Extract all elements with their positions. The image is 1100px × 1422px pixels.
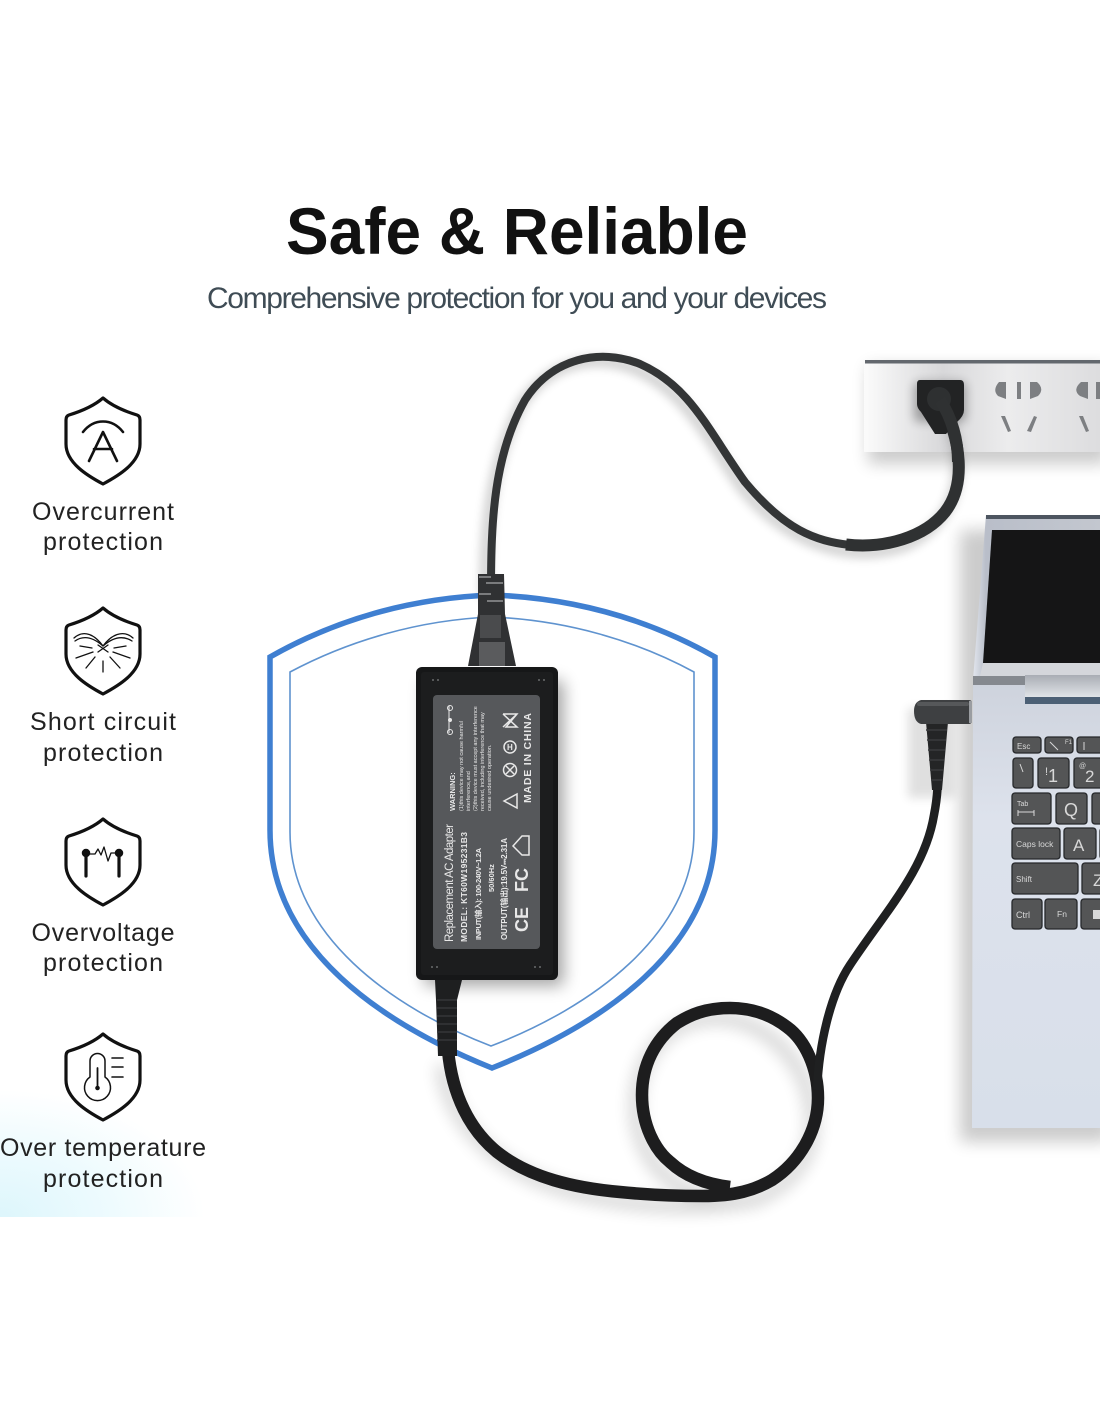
- bottom strain relief: [435, 980, 462, 1056]
- key legends: Q: [1064, 800, 1078, 820]
- icon: temperature shield: [66, 1034, 140, 1120]
- key legends: Esc: [1017, 742, 1030, 751]
- adapter specification text: [444, 824, 509, 942]
- power cable with shadow: [485, 357, 959, 598]
- feature: short circuit protection: [30, 608, 176, 767]
- key legends: Caps lock: [1016, 839, 1054, 849]
- power adapter brick: [416, 667, 564, 986]
- label: over temperature: Over temperature: [0, 1134, 206, 1162]
- adapter specification text: INPUT(输入): 100-240V~1.2A: [473, 847, 483, 940]
- laptop: [960, 515, 1100, 1142]
- certification marks: CE: [512, 907, 532, 932]
- label: overcurrent: protection: [43, 528, 163, 556]
- protection shield outline: [270, 595, 715, 1068]
- key legends: Fn: [1057, 909, 1067, 919]
- label: over temperature: protection: [43, 1165, 163, 1193]
- key legends: @: [1079, 763, 1086, 770]
- key legends: Tab: [1017, 801, 1028, 808]
- adapter warning text: (1)this device may not cause harmful: [459, 721, 465, 811]
- wall plug: [914, 380, 966, 462]
- label: overvoltage: Overvoltage: [32, 919, 174, 947]
- adapter warning text: cause undesired operation.: [487, 744, 493, 811]
- feature: overvoltage protection: [32, 819, 174, 977]
- keyboard: [1012, 737, 1100, 929]
- power strip: [864, 360, 1100, 464]
- title: Safe & Reliable: [286, 194, 748, 268]
- key legends: !: [1045, 766, 1048, 778]
- icon: overvoltage shield: [66, 819, 140, 905]
- adapter label plate: [433, 695, 540, 949]
- key legends: [1016, 740, 1100, 920]
- subtitle: Comprehensive protection for you and your devices: [207, 282, 827, 315]
- corner screws: [431, 679, 545, 968]
- laptop screen: [983, 530, 1100, 663]
- key legends: 1: [1048, 766, 1058, 786]
- adapter warning text: interference,and: [466, 771, 472, 811]
- icon: overcurrent shield: [66, 398, 140, 484]
- DC connector plug: [908, 700, 972, 798]
- power adapter brick: FC: [512, 868, 532, 892]
- label: short circuit: Short circuit: [30, 708, 176, 736]
- laptop base: [972, 684, 1100, 1128]
- key legends: F1: [1065, 740, 1073, 746]
- label: overvoltage: protection: [43, 949, 163, 977]
- label: short circuit: protection: [43, 739, 163, 767]
- coil cable: [448, 1008, 818, 1196]
- adapter specification text: OUTPUT(输出):19.5V⎓2.31A: [499, 838, 509, 940]
- adapter specification text: Replacement AC Adapter: [444, 824, 456, 942]
- key legends: Ctrl: [1016, 910, 1030, 920]
- adapter specification text: MODEL: KT60W195231B3: [459, 832, 469, 942]
- adapter warning text: WARNING:: [448, 772, 457, 811]
- adapter warning text: [448, 706, 493, 811]
- inner shield: [290, 617, 694, 1046]
- outer shield: [270, 595, 715, 1068]
- socket slots: [995, 382, 1100, 432]
- icon: short circuit shield: [66, 608, 140, 694]
- key legends: Shift: [1016, 875, 1033, 884]
- polarity symbol: [448, 706, 450, 733]
- power adapter brick: H: [507, 743, 513, 752]
- made in china text: MADE IN CHINA: [522, 713, 534, 803]
- label: overcurrent: Overcurrent: [32, 498, 174, 526]
- key legends: A: [1073, 836, 1085, 855]
- hinge: [1025, 675, 1100, 698]
- laptop lid: [973, 515, 1100, 680]
- output cable with coil: [442, 765, 938, 1206]
- adapter strain relief top: [468, 574, 516, 666]
- key legends: 2: [1085, 767, 1094, 786]
- feature: overcurrent protection: [32, 398, 174, 556]
- adapter warning text: (2)this device must accept any interference: [473, 706, 479, 811]
- adapter warning text: received, including interference that may: [480, 712, 486, 811]
- background tint bottom-left: [0, 1090, 205, 1217]
- adapter specification text: 50/60Hz: [487, 864, 496, 892]
- feature: over temperature protection: [0, 1034, 206, 1193]
